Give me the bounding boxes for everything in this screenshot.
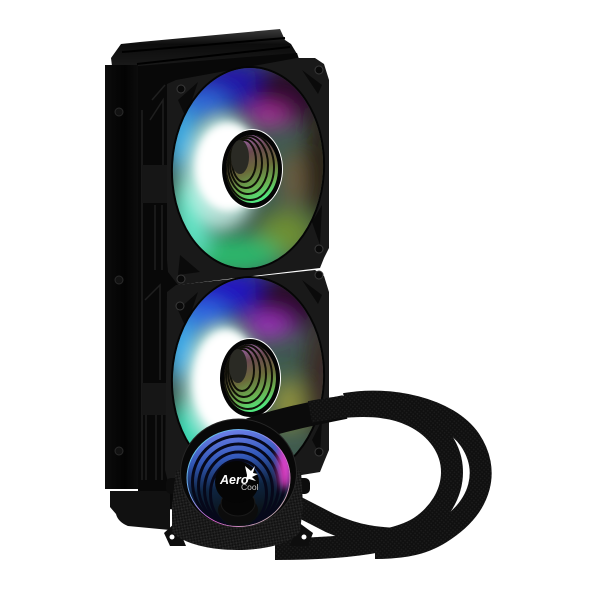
fan: lower [165,270,329,480]
pump mounting ears [164,478,313,546]
fan light [172,68,324,268]
pump hub with logo [215,461,259,524]
radiator fins [138,53,300,510]
radiator top end cap [111,29,297,68]
pump infinity glass [186,429,292,528]
fan infinity hub [221,129,283,209]
tube: front loop [250,406,452,549]
pump hub with logo: Cool [241,482,259,492]
fan infinity hub [219,338,281,418]
fan light [172,278,324,456]
radiator side rail [105,65,138,489]
fan frame [165,270,329,495]
fan frame [167,58,329,285]
fan: upper [165,58,340,285]
tube: rear loop [295,402,481,548]
pump carbon base [172,470,303,550]
logo wordmark: Aero [219,473,249,487]
pump block [164,419,313,550]
logo leaf [245,466,258,482]
radiator bottom end cap [110,491,170,530]
